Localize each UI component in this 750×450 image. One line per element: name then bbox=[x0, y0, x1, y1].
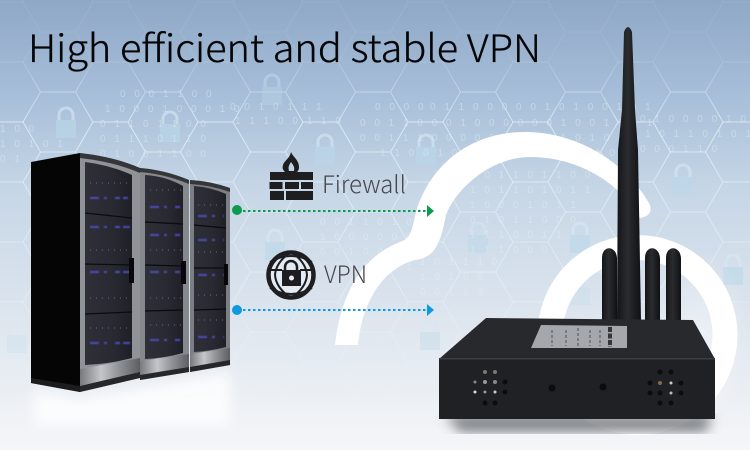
binary code watermarks: 0 0 0 0 bbox=[375, 102, 427, 113]
side antenna 1 bbox=[602, 248, 617, 320]
rack blue lights bbox=[90, 198, 224, 343]
main antenna bbox=[617, 27, 641, 320]
binary code watermarks: 1 1 1 0 0 1 1 bbox=[470, 230, 565, 241]
binary code watermarks: 0 0 0 1 1 0 0 bbox=[120, 89, 215, 100]
rack door handles bbox=[129, 258, 228, 285]
binary code watermarks: 0 1 0 1 1 0 0 0 bbox=[470, 215, 579, 226]
binary code watermarks: 1 0 1 1 0 1 0 1 1 bbox=[470, 185, 593, 196]
hexagon network pattern bbox=[0, 56, 750, 304]
binary code watermarks: 0 0 0 1 1 0 bbox=[640, 144, 720, 155]
firewall link arrow bbox=[232, 205, 434, 217]
binary code watermarks: 1 0 0 0 0 0 0 0 bbox=[320, 232, 429, 243]
binary code watermarks: 0 1 bbox=[0, 154, 23, 165]
side antenna 3 bbox=[666, 248, 681, 320]
cabinet 1 bbox=[80, 153, 140, 392]
icon: firewall bbox=[270, 152, 313, 200]
cloud outline bbox=[335, 132, 750, 430]
label: firewall: Firewall bbox=[322, 165, 406, 200]
binary code watermarks: 0 0 1 1 0 1 1 0 0 bbox=[470, 170, 593, 181]
cabinet 3 bbox=[190, 180, 230, 372]
title: High efficient and stable VPN bbox=[28, 18, 541, 73]
binary code watermarks: 0 0 0 1 0 0 1 bbox=[320, 262, 415, 273]
binary code watermarks: 0 0 1 1 1 0 0 0 0 0 0 0 0 1 1 0 1 0 0 0 bbox=[360, 133, 641, 144]
server rack bbox=[31, 153, 230, 425]
binary code watermarks: 1 0 0 bbox=[0, 124, 37, 135]
router shadow bbox=[445, 415, 712, 432]
icon: vpn globe bbox=[268, 252, 314, 298]
router bbox=[439, 27, 715, 432]
side antenna 2 bbox=[645, 248, 660, 320]
binary code watermarks: 1 0 1 0 1 bbox=[0, 139, 66, 150]
router vents left bbox=[474, 370, 508, 406]
binary code watermarks: 1 1 1 0 0 1 1 0 bbox=[235, 116, 344, 127]
label: vpn: VPN bbox=[324, 255, 367, 290]
binary code watermarks: 0 1 1 1 0 1 1 0 bbox=[100, 134, 209, 145]
server reflection bbox=[34, 372, 230, 425]
binary code watermarks: 0 1 1 0 1 1 0 0 bbox=[100, 119, 209, 130]
binary code watermarks: 1 0 0 0 1 0 1 1 bbox=[470, 200, 579, 211]
binary code watermarks: 0 0 1 0 1 1 1 bbox=[230, 102, 325, 113]
binary code watermarks: 0 0 1 1 0 0 0 1 0 0 0 0 0 0 1 0 0 1 0 1 1 bbox=[360, 118, 655, 129]
binary code watermarks: 0 0 1 1 0 1 0 0 bbox=[320, 217, 429, 228]
rack side panel bbox=[31, 153, 80, 392]
binary code watermarks: 1 0 1 0 0 bbox=[420, 272, 486, 283]
binary code watermarks: 0 0 1 0 0 1 1 0 bbox=[320, 247, 429, 258]
binary code watermarks bbox=[0, 89, 750, 298]
rack shelves bbox=[85, 213, 226, 314]
binary code watermarks: 0 1 0 0 1 1 0 0 bbox=[100, 149, 209, 160]
vpn link arrow bbox=[232, 304, 434, 316]
router center ports bbox=[548, 384, 606, 392]
binary code watermarks: 1 0 0 0 1 0 0 0 1 0 bbox=[105, 104, 243, 115]
binary code watermarks: 1 1 1 0 0 0 bbox=[470, 245, 550, 256]
router front face bbox=[439, 359, 715, 419]
router vents right bbox=[648, 370, 684, 406]
binary code watermarks: 1 1 0 0 1 0 1 0 1 1 0 0 1 1 1 1 0 1 bbox=[380, 148, 632, 159]
binary code watermarks: 1 0 1 1 1 0 bbox=[420, 257, 500, 268]
router label sticker bbox=[531, 325, 627, 348]
lock watermarks bbox=[7, 75, 743, 353]
router top face bbox=[439, 318, 715, 359]
cabinet 2 bbox=[140, 168, 189, 380]
binary code watermarks: 0 1 1 0 0 0 0 0 1 0 1 0 0 1 0 1 bbox=[430, 102, 654, 113]
binary code watermarks: 0 0 1 1 0 bbox=[420, 287, 486, 298]
